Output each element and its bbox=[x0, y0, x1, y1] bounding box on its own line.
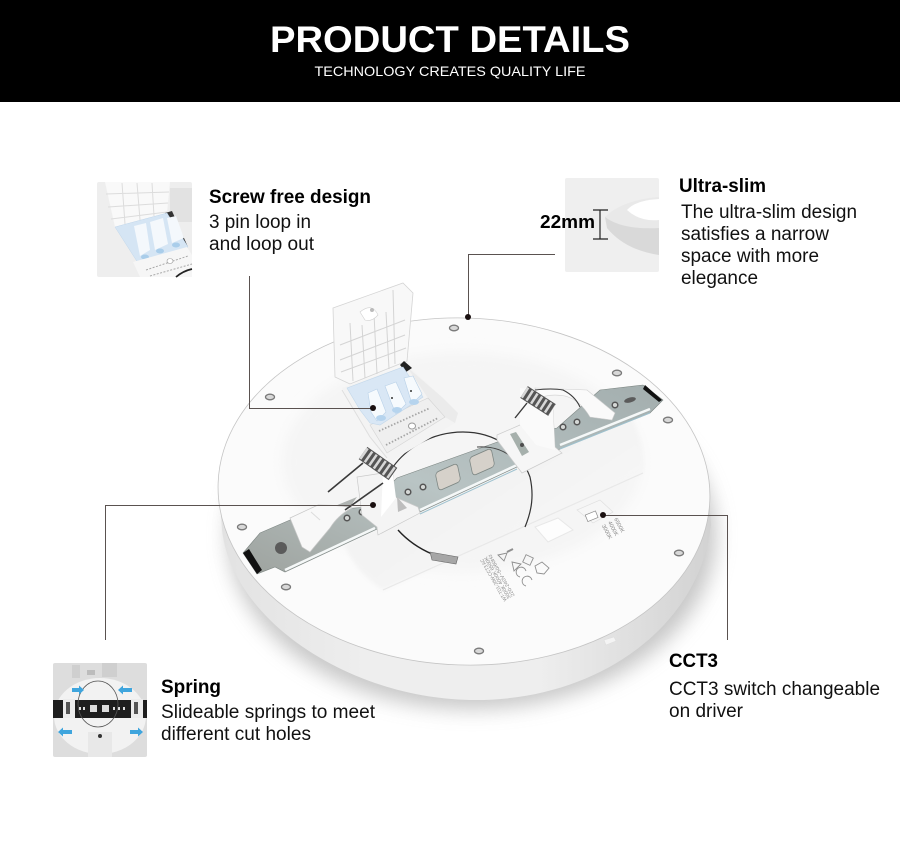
driver label print: 220-240V~50/60Hz bbox=[487, 552, 517, 598]
blue arrows bbox=[58, 686, 143, 736]
CCT switch: 4000K bbox=[606, 520, 619, 538]
flat driver plate edge bbox=[383, 473, 643, 590]
description: different cut holes bbox=[161, 724, 311, 745]
description: space with more bbox=[681, 246, 819, 267]
bracket square holes bbox=[435, 463, 461, 491]
panel: CCT3 bbox=[669, 651, 880, 722]
blue wire connector bbox=[347, 367, 423, 425]
mounting bracket bbox=[243, 385, 663, 574]
header band bbox=[0, 0, 900, 102]
callout dots bbox=[370, 314, 606, 518]
description: on driver bbox=[669, 701, 744, 722]
subtitle: TECHNOLOGY CREATES QUALITY LIFE bbox=[314, 63, 586, 79]
disc shadow bbox=[228, 361, 716, 709]
recess under bracket bbox=[345, 395, 643, 590]
heading: CCT3 bbox=[669, 651, 718, 672]
22mm dimension bbox=[540, 210, 608, 239]
right clip bbox=[497, 388, 615, 473]
left clip bbox=[290, 453, 420, 552]
driver label print: WT-TD1-20W-CCT3 AC bbox=[479, 557, 509, 602]
thumbnail: disc edge bbox=[565, 178, 659, 272]
bracket round holes bbox=[275, 542, 287, 554]
description: CCT3 switch changeable bbox=[669, 679, 880, 700]
description bbox=[681, 202, 857, 289]
callout lines bbox=[106, 254, 728, 640]
heading: Screw free design bbox=[209, 187, 371, 208]
description: satisfies a narrow bbox=[681, 224, 829, 245]
blank switch cover bbox=[535, 518, 573, 542]
22mm dimension: 22mm bbox=[540, 212, 595, 232]
panel: ultra-slim bbox=[540, 176, 857, 289]
panel: screw free design bbox=[97, 182, 371, 277]
terminal box bbox=[333, 283, 458, 462]
description: elegance bbox=[681, 268, 758, 289]
CCT switch: 3000K bbox=[600, 524, 613, 541]
title: PRODUCT DETAILS bbox=[270, 19, 630, 60]
screws bbox=[238, 325, 684, 654]
wire ferrule bbox=[430, 552, 458, 564]
safety wire loop bbox=[393, 432, 532, 527]
disc top face bbox=[212, 310, 716, 673]
thumbnail: terminal bbox=[97, 182, 192, 277]
terminal box body bbox=[342, 365, 458, 462]
left spring bbox=[328, 453, 393, 510]
description bbox=[669, 679, 880, 722]
panel: spring bbox=[53, 663, 376, 757]
right spring bbox=[515, 389, 580, 418]
description: and loop out bbox=[209, 234, 315, 255]
CCT switch: 6500K bbox=[612, 517, 625, 534]
description: Slideable springs to meet bbox=[161, 702, 376, 723]
description bbox=[209, 212, 315, 255]
certification marks bbox=[498, 549, 549, 586]
description bbox=[161, 702, 376, 745]
thumbnail: bracket with arrows bbox=[53, 663, 147, 757]
heading: Ultra-slim bbox=[679, 176, 766, 197]
CCT switch bbox=[577, 500, 625, 541]
description: The ultra-slim design bbox=[681, 202, 857, 223]
hinged lid bbox=[333, 283, 413, 384]
driver label print: 3000K 4000K 6500K bbox=[483, 555, 513, 600]
recessed inner ring bbox=[282, 352, 642, 572]
terminal grille bbox=[370, 398, 445, 453]
bracket black ends bbox=[243, 549, 262, 574]
disc side wall bbox=[219, 487, 711, 700]
side tab bbox=[604, 637, 616, 645]
description: 3 pin loop in bbox=[209, 212, 311, 233]
heading: Spring bbox=[161, 677, 221, 698]
product: round ceiling light bbox=[212, 283, 716, 709]
